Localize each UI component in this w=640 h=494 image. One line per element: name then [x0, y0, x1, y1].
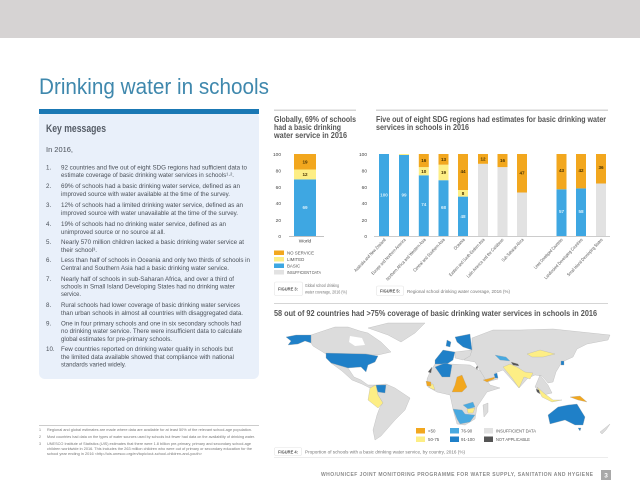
heading: figure 4: 58 out of 92 countries had >75% coverage of basic drinking water services in schools in 2016: [274, 308, 597, 318]
caption: figure 5: [376, 286, 510, 296]
key message list: than urban schools in almost all countries with disaggregated data.: [61, 310, 243, 317]
rotated region labels: Northern Africa and Western Asia: [385, 237, 427, 282]
key message list: 8.: [46, 302, 51, 309]
key message list: Less than half of schools in Oceania and only two thirds of schools in: [61, 257, 251, 264]
key message list: no drinking water service. There were insufficient data to calculate: [61, 328, 243, 335]
stacked bars: regions: 58: [578, 209, 584, 214]
legend: figure 3: BASIC: [287, 264, 300, 268]
key message list: improved source with water available at the time of the survey.: [61, 191, 230, 198]
key message list: 1.: [46, 164, 51, 172]
stacked bars: regions: 100: [380, 192, 388, 198]
caption: figure 4: FIGURE 4:: [278, 449, 298, 454]
key message list: standards varied widely.: [61, 362, 126, 368]
panel: figure 5 regional chart: [353, 110, 610, 296]
stacked bars: regions: 57: [559, 209, 564, 214]
footnotes: 3: [39, 442, 41, 446]
caption: figure 3: FIGURE 3:: [278, 286, 298, 292]
key message list: Central and Southern Asia had a basic drinking water service.: [61, 265, 229, 272]
key message list: Few countries reported on drinking water quality in schools but: [61, 346, 233, 353]
caption: figure 4: [274, 448, 465, 456]
heading: key messages: Key messages: [46, 123, 106, 135]
footnotes: Regional and global estimates are made where data are available for at least 50% of the relevant school-age population.: [47, 428, 252, 432]
stacked bars: regions: 42: [578, 168, 584, 173]
caption: figure 5: FIGURE 5:: [380, 288, 400, 294]
stacked bars: regions: 44: [460, 169, 466, 174]
footnotes: school year ending in 2016 <http://uis.unesco.org/en/topic/out-school-children-and-youth>: [47, 452, 202, 456]
y axis labels: 80: [276, 168, 281, 174]
title: Drinking water in schools: [39, 74, 269, 99]
map: dark blue, 91-100%: [286, 334, 585, 431]
heading: figure 3: Globally, 69% of schools: [274, 114, 356, 124]
top grey band: [0, 0, 640, 38]
y axis labels: 40: [362, 201, 367, 207]
key message list: Nearly 570 million children lacked a basic drinking water service at: [61, 239, 244, 246]
y axis labels: 100: [359, 152, 367, 158]
footnotes: UNESCO Institute of Statistics (UIS) estimates that there were 1.8 billion pre-primary, primary and secondary school-age: [47, 442, 251, 446]
world map: [286, 323, 610, 440]
y axis labels: 100: [273, 152, 281, 158]
key message list: 5.: [46, 239, 51, 246]
key message list: schools in Small Island Developing States had no drinking water: [61, 284, 235, 290]
heading: figure 3: [273, 114, 356, 140]
footnotes: 1: [39, 428, 41, 432]
key message list: 4.: [46, 221, 51, 228]
key message list: [46, 164, 251, 368]
key message list: their school³.: [61, 247, 97, 254]
legend: figure 3: [274, 250, 321, 275]
key message list: One in four primary schools and one in six secondary schools had: [61, 320, 242, 328]
rotated region labels: [353, 237, 604, 282]
stacked bars: regions: 19: [441, 170, 446, 175]
key message list: 6.: [46, 257, 51, 264]
key message list: unimproved source or no source at all.: [61, 229, 165, 236]
key message list: 9.: [46, 320, 51, 328]
heading: figure 3: water service in 2016: [273, 130, 347, 140]
stacked bars: regions: 16: [421, 158, 427, 163]
caption: figure 3: water coverage, 2016 (%): [305, 290, 347, 296]
y axis labels: 0: [278, 234, 281, 240]
stacked bars: regions: 8: [462, 191, 465, 196]
rotated region labels: Oceania: [453, 237, 466, 251]
heading: figure 5: [376, 114, 607, 132]
legend: figure 3: INSUFFICIENT DATA: [287, 270, 321, 275]
key message list: 12% of schools had a limited drinking water service, defined as an: [61, 202, 244, 209]
caption: figure 4: Proportion of schools with a basic drinking water service, by country, 2016 (%): [305, 450, 465, 456]
stacked bar: world: [294, 154, 316, 236]
y axis labels: [273, 152, 281, 240]
stacked bars: regions: 68: [441, 205, 446, 210]
legend: figure 4: 76-90: [461, 428, 473, 434]
legend: figure 4: NOT APPLICABLE: [496, 437, 530, 442]
caption: figure 3: Global school drinking: [305, 283, 339, 289]
key message list: estimate coverage of basic drinking water services in schools¹·².: [61, 172, 234, 179]
panel: figure 3 global chart: [273, 110, 356, 296]
y axis labels: 40: [276, 201, 281, 207]
y axis labels: [359, 152, 367, 240]
rotated region labels: Least Developed Countries: [533, 237, 564, 270]
stacked bars: regions: 10: [421, 169, 427, 174]
rotated region labels: Eastern and South-Eastern Asia: [448, 237, 486, 277]
footnotes: children worldwide in 2016. This includes the 263 million children who were out of primary or secondary education for the: [47, 447, 252, 451]
legend: figure 4: 91-100: [461, 437, 475, 442]
legend: figure 3: NO SERVICE: [287, 250, 314, 256]
key message list: 7.: [46, 276, 51, 283]
y axis labels: 0: [364, 234, 367, 240]
map: orange, below 50%: [426, 375, 587, 402]
rotated region labels: Small Island Developing States: [566, 237, 604, 277]
y axis labels: 60: [362, 185, 367, 191]
legend: figure 3: LIMITED: [287, 257, 304, 262]
legend: figure 4: INSUFFICIENT DATA: [496, 428, 536, 434]
footnotes: Most countries had data on the types of water sources used by schools but fewer had data on the availability of drinking water.: [47, 435, 255, 439]
footnotes: [39, 425, 259, 456]
key message list: 69% of schools had a basic drinking water service, defined as an: [61, 183, 241, 190]
key message list: 3.: [46, 202, 51, 209]
stacked bar: world: 12: [302, 172, 308, 177]
stacked bars: regions: 43: [559, 168, 564, 173]
y axis labels: 20: [362, 218, 367, 224]
key message list: improved source with water unavailable at the time of the survey.: [61, 210, 238, 217]
key message list: 2.: [46, 183, 51, 190]
y axis labels: 60: [276, 185, 281, 191]
map: dark grey, not applicable: [428, 362, 540, 394]
stacked bars: regions: 99: [401, 192, 407, 198]
stacked bar: world: 69: [302, 205, 308, 210]
legend: figure 4: [416, 428, 536, 442]
stacked bars: regions: 36: [598, 165, 604, 170]
heading: figure 3: had a basic drinking: [274, 122, 341, 132]
stacked bars: regions: 47: [519, 170, 525, 176]
stacked bars: regions: 12: [480, 156, 486, 162]
y axis labels: 80: [362, 168, 367, 174]
caption: figure 5: Regional school drinking water coverage, 2016 (%): [407, 289, 510, 295]
heading: figure 5: services in schools in 2016: [376, 122, 469, 132]
key message list: 10.: [46, 346, 55, 353]
rotated region labels: Europe and Northern America: [370, 237, 407, 276]
rotated region labels: Central and Southern Asia: [412, 237, 446, 273]
key message list: the limited data available showed that compliance with national: [61, 354, 234, 361]
legend: figure 4: <50: [428, 428, 436, 434]
stacked bars: regions: 13: [441, 157, 446, 162]
footer: WHO/UNICEF JOINT MONITORING PROGRAMME FOR WATER SUPPLY, SANITATION AND HYGIENE: [321, 472, 594, 478]
stacked bars: regions: 16: [500, 158, 505, 163]
key message list: global estimates for pre-primary schools.: [61, 336, 172, 343]
key message list: 92 countries and five out of eight SDG regions had sufficient data to: [61, 164, 248, 172]
rotated region labels: Latin America and the Caribbean: [466, 237, 505, 279]
key message list: Rural schools had lower coverage of basic drinking water services: [61, 302, 240, 309]
stacked bars: regions: [379, 154, 606, 236]
stacked bar: world: 19: [302, 160, 308, 164]
footnotes: 2: [39, 435, 41, 439]
rotated region labels: Sub-Saharan Africa: [501, 237, 525, 263]
key message list: 19% of schools had no drinking water service, defined as an: [61, 221, 227, 228]
page number: 3: [604, 472, 608, 480]
y axis labels: 20: [276, 218, 281, 224]
intro: in 2016: In 2016,: [46, 147, 73, 154]
key message list: service.: [61, 291, 81, 298]
map: white hudson bay: [349, 336, 365, 346]
caption: figure 3: [274, 282, 347, 296]
key message list: Nearly half of schools in sub-Saharan Africa, and over a third of: [61, 276, 234, 283]
legend: figure 4: 50-75: [428, 437, 440, 442]
map: light blue, 76-90%: [453, 355, 510, 424]
x label: world: World: [299, 238, 312, 244]
rotated region labels: Landlocked Developing Countries: [543, 237, 584, 280]
map: grey land: [311, 323, 610, 440]
panel: figure 4 map: [274, 303, 610, 458]
map: yellow, 50-75%: [368, 350, 562, 413]
stacked bars: regions: 48: [460, 214, 466, 219]
rotated region labels: Australia and New Zealand: [353, 237, 387, 273]
panel: key messages: [39, 109, 259, 379]
page number: [601, 470, 611, 480]
stacked bars: regions: 74: [421, 202, 427, 207]
